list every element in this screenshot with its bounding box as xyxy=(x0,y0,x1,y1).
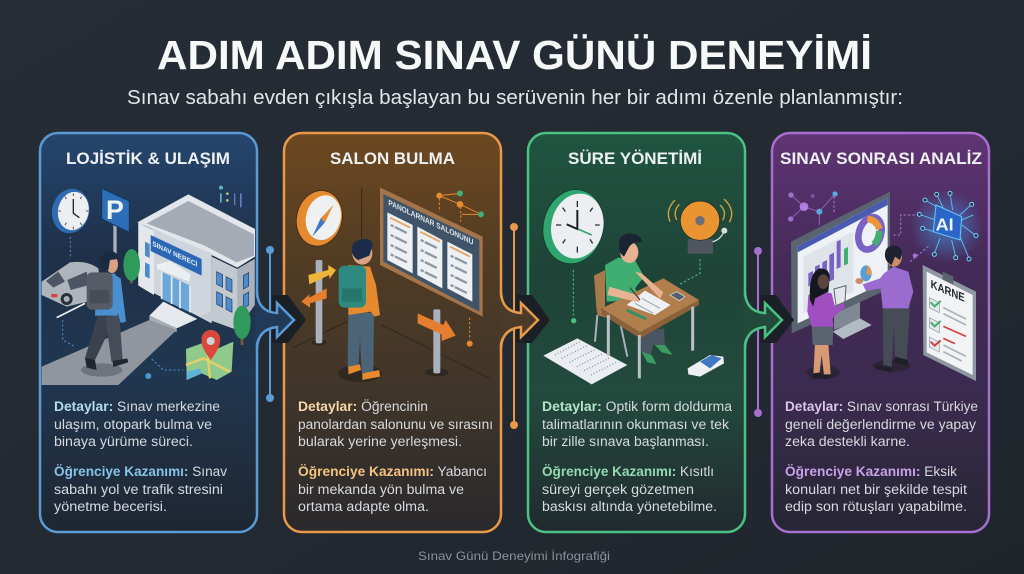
panel text: sınav sonrası: geneli değerlendirme ve yapay xyxy=(785,417,976,432)
illustration: student reading the board xyxy=(291,186,490,382)
icon: student from behind xyxy=(338,239,382,382)
panel: lojistik ve ulaşım xyxy=(40,133,257,532)
icon: parking sign xyxy=(102,188,129,255)
panel text: lojistik: ulaşım, otopark bulma ve xyxy=(54,417,212,432)
arrow: lojistik to salon xyxy=(255,292,306,348)
icon: room board xyxy=(380,187,483,317)
illustration: analysis on monitor with AI xyxy=(788,190,983,381)
path xyxy=(42,320,177,385)
panel text: süre yönetimi: talimatlarının okunması ve tek xyxy=(542,417,729,432)
panel text: sınav sonrası: zeka destekli karne. xyxy=(785,434,910,449)
icon: man pointing at the screen xyxy=(855,246,913,372)
icon: eraser xyxy=(688,355,724,377)
icon: parking sign: P xyxy=(106,195,124,225)
heading: salon bulma: SALON BULMA xyxy=(330,150,455,168)
heading: lojistik ve ulaşım: LOJİSTİK & ULAŞIM xyxy=(66,150,230,168)
icon: optical answer form xyxy=(543,338,627,384)
icon: signpost right xyxy=(418,309,456,376)
panel text: süre yönetimi: baskısı altında yönetebilme. xyxy=(542,499,717,514)
icon: car xyxy=(42,262,102,307)
illustration: student at exam desk xyxy=(536,184,732,384)
icon: student seated xyxy=(594,233,673,364)
panel text: süre yönetimi: süreyi gerçek gözetmen xyxy=(542,482,694,497)
connector: timeline purple xyxy=(754,247,762,417)
panel text: salon bulma: bir mekanda yön bulma ve xyxy=(298,482,464,497)
panel: sınav sonrası analiz xyxy=(772,133,989,532)
icon: network nodes xyxy=(788,191,838,225)
panel text: salon bulma: ortama adapte olma. xyxy=(298,499,429,514)
icon: trees xyxy=(123,249,251,345)
panel text: sınav sonrası xyxy=(785,399,978,514)
panel text: süre yönetimi: bir zille sınava başlanması. xyxy=(542,434,709,449)
panel text: salon bulma: bularak yerine yerleşmesi. xyxy=(298,434,462,449)
icon: compass xyxy=(291,186,348,251)
panel: süre yönetimi xyxy=(528,133,745,532)
panel text: sınav sonrası: edip son rötuşları yapabilme. xyxy=(785,499,967,514)
small data dots xyxy=(219,186,242,207)
icon: AI chip: AI xyxy=(936,214,954,234)
icon: exam desk xyxy=(602,278,699,378)
icon: clock xyxy=(48,185,94,237)
panel: salon bulma xyxy=(284,133,501,532)
icon: report card: KARNE xyxy=(931,277,965,305)
panel text: sınav sonrası: konuları net bir şekilde tespit xyxy=(785,482,967,497)
icon: student walking xyxy=(81,251,128,377)
panel text: sınav sonrası: Öğrenciye Kazanımı: Eksik xyxy=(785,464,957,479)
panel text: lojistik: yönetme becerisi. xyxy=(54,499,167,514)
panel text: lojistik: Öğrenciye Kazanımı: Sınav xyxy=(54,464,227,479)
subtitle: Sınav sabahı evden çıkışla başlayan bu serüvenin her bir adımı özenle planlanmıştır: xyxy=(127,86,903,109)
panel text: salon bulma xyxy=(298,399,493,514)
icon: network nodes xyxy=(436,190,484,222)
panel text: lojistik: sabahı yol ve trafik stresini xyxy=(54,482,223,497)
panel text: süre yönetimi xyxy=(542,399,733,514)
icon: woman with tablet xyxy=(807,268,846,379)
icon: monitor stand xyxy=(833,297,872,339)
panel text: salon bulma: Detaylar: Öğrencinin xyxy=(298,399,428,414)
title: ADIM ADIM SINAV GÜNÜ DENEYİMİ xyxy=(157,32,872,78)
icon: report card xyxy=(923,265,976,381)
heading: süre yönetimi: SÜRE YÖNETİMİ xyxy=(568,149,702,168)
panel text: süre yönetimi: Detaylar: Optik form doldurma xyxy=(542,399,733,414)
connector: timeline orange xyxy=(510,223,518,429)
icon: bell xyxy=(668,199,732,254)
panel text: sınav sonrası: Detaylar: Sınav sonrası Türkiye xyxy=(785,399,978,414)
icon: monitor with charts xyxy=(791,192,890,333)
icon: building: SINAV NERECİ xyxy=(152,239,197,269)
panel text: lojistik: Detaylar: Sınav merkezine xyxy=(54,399,220,414)
icon: building xyxy=(137,194,255,332)
panel text: salon bulma: Öğrenciye Kazanımı: Yabancı xyxy=(298,464,487,479)
panel text: süre yönetimi: Öğrenciye Kazanımı: Kısıtlı xyxy=(542,464,714,479)
arrow: salon to süre xyxy=(499,292,550,348)
icon: room board: PANOLARNAR SALONUNU xyxy=(388,197,473,247)
connector: timeline blue xyxy=(266,246,274,402)
icon: AI chip xyxy=(910,190,983,263)
illustration: walking student and exam building xyxy=(42,185,255,385)
icon: signpost left xyxy=(301,260,336,345)
icon: map and pin xyxy=(186,330,233,380)
heading: sınav sonrası analiz: SINAV SONRASI ANALİZ xyxy=(780,150,982,168)
panel text: lojistik: binaya yürüme süreci. xyxy=(54,434,193,449)
icon: student arms on desk xyxy=(607,272,663,302)
icon: wall clock xyxy=(536,184,610,269)
footer caption: Sınav Günü Deneyimi İnfografiği xyxy=(418,549,610,563)
arrow: süre to analiz xyxy=(743,292,794,348)
panel text: lojistik xyxy=(54,399,227,514)
panel text: salon bulma: panolardan salonunu ve sırasını xyxy=(298,417,493,432)
